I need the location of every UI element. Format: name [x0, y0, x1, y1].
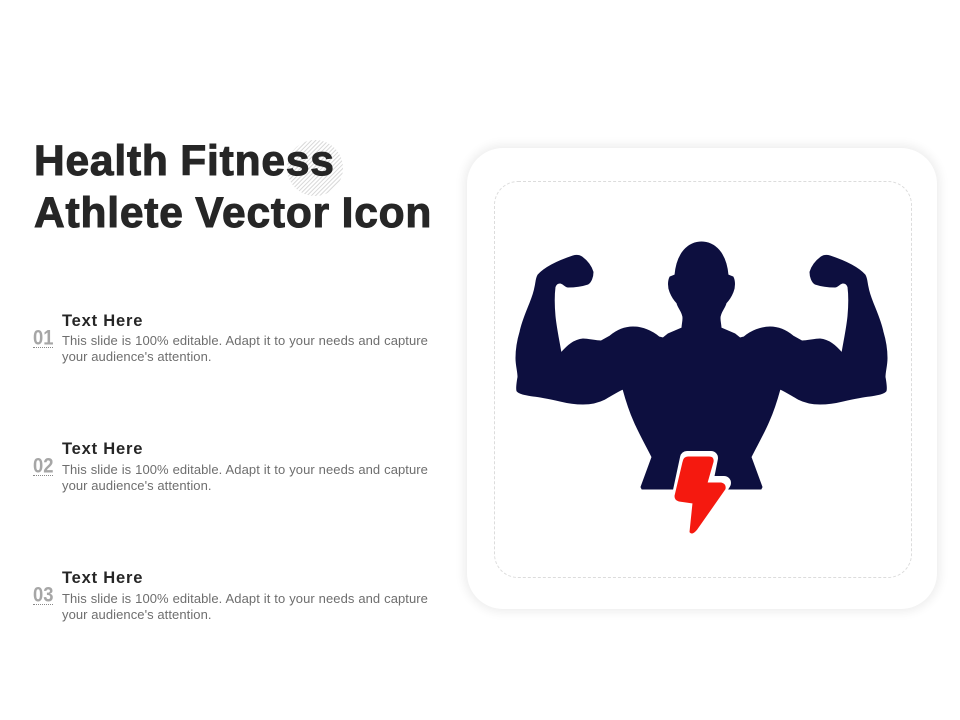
list item 02: [33, 440, 428, 493]
number 01: 01: [33, 326, 53, 350]
list item 01: [33, 312, 428, 364]
description 03: [62, 591, 428, 622]
number 02: 02: [33, 454, 53, 478]
description 02: your audience's attention.: [62, 478, 212, 493]
heading 03: Text Here: [62, 569, 143, 587]
panel: icon card: [467, 148, 937, 609]
description 02: [62, 462, 428, 493]
heading 01: Text Here: [62, 312, 143, 330]
decorative hatched circle behind title: [287, 140, 343, 196]
number 03: 03: [33, 583, 53, 607]
title: Health Fitness: [34, 138, 335, 185]
icon: lightning bolt: [675, 457, 725, 533]
athlete silhouette: [516, 242, 887, 489]
panel: dashed inner frame: [494, 181, 912, 578]
title: Athlete Vector Icon: [34, 190, 432, 237]
description 03: This slide is 100% editable. Adapt it to your needs and capture: [62, 591, 428, 606]
title: [34, 138, 432, 237]
description 01: [62, 333, 428, 364]
heading 02: Text Here: [62, 440, 143, 458]
description 01: This slide is 100% editable. Adapt it to your needs and capture: [62, 333, 428, 348]
description 01: your audience's attention.: [62, 349, 212, 364]
description 03: your audience's attention.: [62, 607, 212, 622]
description 02: This slide is 100% editable. Adapt it to your needs and capture: [62, 462, 428, 477]
list item 03: [33, 569, 428, 622]
